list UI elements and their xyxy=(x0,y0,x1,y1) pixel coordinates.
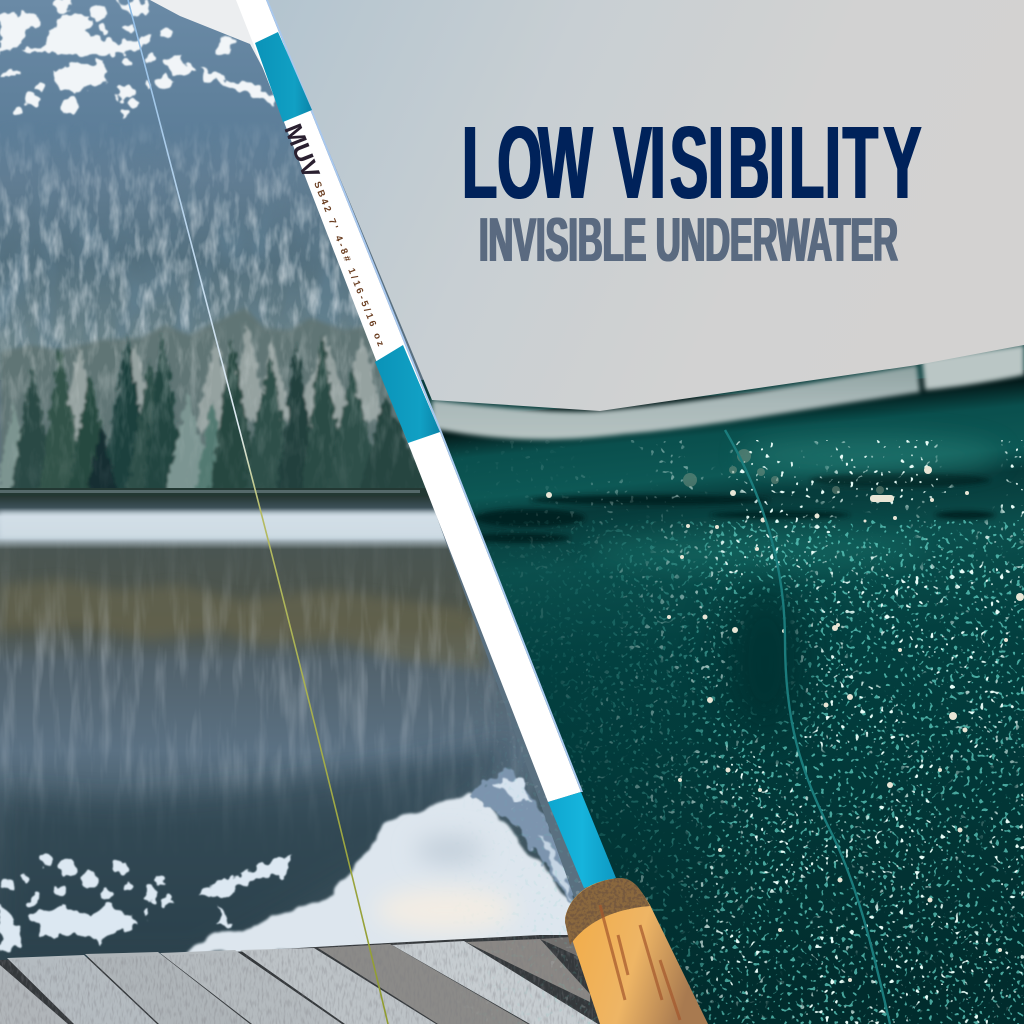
dark ripples xyxy=(470,473,995,543)
fishing line xyxy=(128,0,388,1024)
reflected snow xyxy=(0,854,292,950)
fishing rod xyxy=(236,0,708,1024)
waterline band xyxy=(432,345,1024,439)
speckle field xyxy=(440,440,1024,1024)
dock xyxy=(0,935,620,1024)
underwater fishing line xyxy=(725,430,890,1024)
heading: low visibility: LOW VISIBILITY xyxy=(462,104,922,220)
title block xyxy=(462,104,922,275)
rod logo: MUV xyxy=(279,120,326,182)
bokeh bubbles xyxy=(683,449,884,494)
rod white sections xyxy=(236,0,581,802)
underwater panel xyxy=(420,340,1024,1024)
blue wrap: middle xyxy=(375,345,440,443)
cork handle xyxy=(560,875,708,1024)
rod specification text: SB42 7' 4-8# 1/16-5/16 oz xyxy=(311,180,386,348)
snow patches xyxy=(0,0,272,118)
left scene: mountain lake xyxy=(0,0,620,1024)
treeline xyxy=(0,308,432,510)
blue wrap: bottom xyxy=(548,792,616,888)
grey sky panel xyxy=(266,0,1024,411)
light haze xyxy=(740,435,1000,475)
blue wrap: top xyxy=(255,32,312,122)
mountain xyxy=(0,0,363,380)
sky xyxy=(150,0,264,70)
cloud reflection xyxy=(165,792,575,956)
lake reflection xyxy=(0,498,574,960)
bright particles xyxy=(546,466,1024,982)
